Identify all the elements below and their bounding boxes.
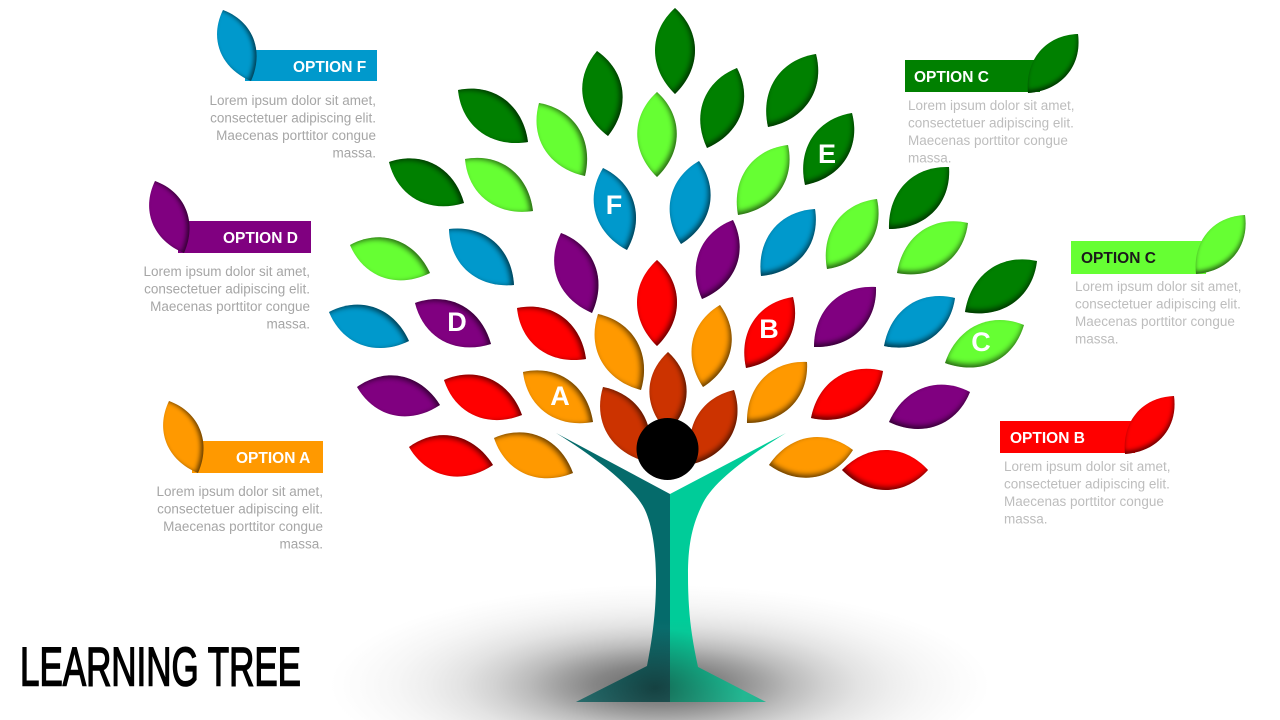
leaf: red [451, 240, 646, 429]
callout: option C light green: OPTION C [1081, 250, 1156, 267]
callout: option F: massa. [332, 146, 376, 160]
callout: option A: OPTION A [236, 450, 310, 467]
callout: option D [90, 131, 311, 332]
leaf: dark green [391, 21, 589, 213]
leaf: red [386, 313, 575, 485]
leaf: top dark green [612, 0, 733, 127]
callout: option A: Maecenas porttitor congue [163, 519, 323, 534]
callout: option D: OPTION D [223, 230, 298, 247]
tree canopy: leaves [274, 0, 1101, 544]
leaf: red [809, 407, 964, 528]
leaf: purple [747, 217, 942, 411]
leaf A: orange [457, 304, 653, 492]
callout: option D: massa. [266, 316, 310, 332]
callout: option D: consectetuer adipiscing elit. [144, 282, 310, 296]
leaf: brown left [529, 325, 715, 523]
leaf D: purple: D [447, 307, 467, 337]
leaf: dark green [637, 12, 803, 198]
callout: option B [1000, 336, 1233, 526]
leaf: light green [595, 56, 714, 209]
callout: option D: Lorem ipsum dolor sit amet, [143, 264, 310, 279]
callout: option B: OPTION B [1010, 430, 1085, 447]
callout: option F [159, 0, 377, 161]
leaf: orange [680, 293, 873, 486]
callout: option F: Maecenas porttitor congue [216, 128, 376, 143]
title: LEARNING TREE [20, 636, 301, 698]
leaf: dark green [696, 0, 885, 187]
leaf: dark green [900, 187, 1101, 380]
callout: option F: Lorem ipsum dolor sit amet, [209, 93, 376, 108]
leaf: brown centre [610, 318, 722, 462]
leaf: red [361, 383, 537, 533]
callout: option C dark green: consectetuer adipiscing elit. [908, 116, 1074, 130]
callout: option A: massa. [279, 536, 323, 552]
leaf: light green [296, 180, 479, 342]
callout: option A [104, 351, 323, 552]
leaf: purple [836, 320, 1024, 488]
leaf: orange [637, 258, 782, 430]
leaf: blue [274, 246, 459, 410]
leaf B: red: B [759, 314, 779, 344]
leaf: light green [668, 79, 856, 275]
leaf: blue [692, 141, 883, 338]
leaf: orange [726, 382, 898, 527]
leaf: red centre [594, 224, 715, 379]
leaf: purple [309, 324, 484, 472]
callout: option D: Maecenas porttitor congue [150, 299, 310, 314]
leaf: light green [466, 42, 651, 237]
callout: option C light green: Maecenas porttitor congue [1075, 314, 1235, 329]
callout: option C dark green: OPTION C [914, 69, 989, 86]
leaf: dark green [530, 8, 669, 176]
leaf E: dark green [735, 48, 920, 244]
callout: option C light green: consectetuer adipiscing elit. [1075, 296, 1241, 312]
callout: option C dark green: Maecenas porttitor congue [908, 133, 1068, 148]
black circle at tree crown [636, 418, 698, 480]
leaf: blue [822, 226, 1017, 412]
ground shadow [330, 585, 990, 720]
leaf: brown right [623, 329, 801, 520]
callout: option A: Lorem ipsum dolor sit amet, [156, 484, 323, 499]
callout: option C light green: Lorem ipsum dolor sit amet, [1075, 279, 1242, 294]
callout: option C dark green: Lorem ipsum dolor sit amet, [908, 98, 1075, 113]
callout: option B: consectetuer adipiscing elit. [1004, 476, 1170, 492]
callout: option C dark green: massa. [908, 150, 952, 166]
tree trunk [556, 433, 786, 702]
leaf: blue [381, 162, 576, 354]
leaf B: red [676, 233, 860, 426]
callout: option F: consectetuer adipiscing elit. [210, 110, 376, 126]
callout: option B: Lorem ipsum dolor sit amet, [1004, 459, 1171, 474]
callout: option B: Maecenas porttitor congue [1004, 494, 1164, 509]
leaf D: purple [353, 235, 547, 415]
leaf: light green [398, 92, 594, 280]
leaf: orange [524, 253, 708, 450]
leaf: orange [435, 370, 626, 544]
leaf C: light green [887, 251, 1083, 430]
callout: option A: consectetuer adipiscing elit. [157, 502, 323, 516]
leaf: purple [633, 164, 799, 350]
leaf A: orange: A [550, 381, 570, 411]
callout: option C light green [1071, 154, 1280, 346]
leaf F: blue: F [606, 190, 622, 220]
leaf: blue [614, 113, 762, 288]
callout: option F: OPTION F [293, 59, 366, 76]
leaf E: dark green: E [818, 139, 836, 169]
callout: option C light green: massa. [1075, 332, 1119, 346]
leaf F: blue [533, 117, 691, 299]
leaf: dark green [328, 95, 520, 273]
leaf C: light green: C [971, 327, 991, 357]
leaf: dark green [821, 97, 1016, 293]
callout: option B: massa. [1004, 512, 1048, 526]
leaf: purple [490, 179, 657, 366]
leaf: red [749, 299, 945, 484]
leaf: light green [834, 150, 1031, 340]
leaf: light green [757, 133, 945, 329]
callout: option C dark green [905, 0, 1139, 165]
